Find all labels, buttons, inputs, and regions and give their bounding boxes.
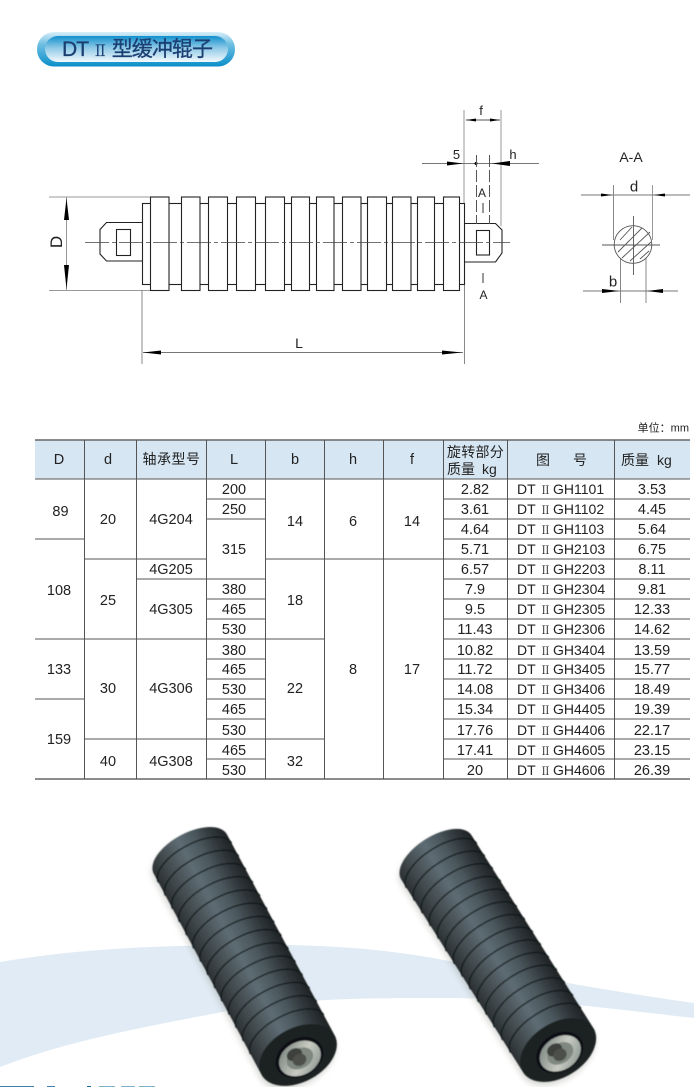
column rotating part mass: 9.5 — [465, 602, 485, 618]
left shaft end — [100, 222, 142, 261]
column rotating part mass — [457, 482, 493, 779]
column drawing number: GH2306 — [553, 621, 605, 637]
dimension D — [47, 197, 150, 290]
dimensions f, 5, h and section marks: 5 — [453, 147, 460, 162]
dimension D: D — [47, 236, 66, 248]
column total mass: 13.59 — [634, 643, 670, 659]
column drawing number: GH3406 — [553, 681, 605, 697]
product photo: left roller — [141, 816, 349, 1087]
column rotating part mass: 11.72 — [457, 662, 493, 678]
background swoosh — [0, 945, 694, 1067]
column L: 530 — [222, 723, 246, 739]
column rotating part mass: 15.34 — [457, 702, 493, 718]
column drawing number: DT — [517, 722, 536, 738]
column drawing number: Ⅱ — [540, 505, 551, 517]
column drawing number: DT — [517, 521, 536, 537]
column drawing number — [517, 481, 605, 778]
merged columns D, d, bearing, b, h, f: 159 — [47, 732, 71, 748]
column drawing number: Ⅱ — [540, 585, 551, 597]
column drawing number: Ⅱ — [540, 726, 551, 738]
merged columns D, d, bearing, b, h, f: 4G205 — [149, 562, 193, 578]
column L: 465 — [222, 743, 246, 759]
column L: 530 — [222, 622, 246, 638]
column L — [222, 482, 246, 779]
unit label: 单位：mm — [638, 420, 689, 434]
table header labels: L — [230, 452, 238, 468]
column total mass: 4.45 — [638, 502, 666, 518]
table header labels: kg — [482, 461, 497, 477]
column drawing number: DT — [517, 581, 536, 597]
column rotating part mass: 11.43 — [457, 622, 493, 638]
merged columns D, d, bearing, b, h, f: 18 — [287, 593, 303, 609]
dimension L — [142, 285, 464, 364]
merged columns D, d, bearing, b, h, f: 133 — [47, 662, 71, 678]
column drawing number: Ⅱ — [540, 485, 551, 497]
product photo: right roller — [387, 817, 609, 1087]
column drawing number: GH4406 — [553, 722, 605, 738]
column drawing number: DT — [517, 661, 536, 677]
column drawing number: DT — [517, 642, 536, 658]
column drawing number: Ⅱ — [540, 605, 551, 617]
column rotating part mass: 7.9 — [465, 582, 485, 598]
centre line — [85, 242, 510, 244]
column drawing number: Ⅱ — [540, 525, 551, 537]
hatched shaft circle — [602, 216, 660, 275]
column drawing number: DT — [517, 681, 536, 697]
column L: 380 — [222, 582, 246, 598]
dimensions f, 5, h and section marks — [422, 103, 539, 302]
title pill — [37, 32, 235, 66]
column total mass: 8.11 — [638, 562, 666, 578]
column total mass: 9.81 — [638, 582, 666, 598]
table header labels: b — [291, 452, 299, 468]
column L: 380 — [222, 643, 246, 659]
column drawing number: Ⅱ — [540, 646, 551, 658]
column rotating part mass: 10.82 — [457, 643, 493, 659]
table header labels: D — [54, 452, 64, 468]
column total mass: 6.75 — [638, 542, 666, 558]
dimensions f, 5, h and section marks: h — [509, 147, 517, 162]
column L: 530 — [222, 682, 246, 698]
column drawing number: GH4405 — [553, 701, 605, 717]
column drawing number: DT — [517, 762, 536, 778]
merged columns D, d, bearing, b, h, f: 4G305 — [149, 602, 193, 618]
merged columns D, d, bearing, b, h, f — [47, 504, 420, 770]
dimensions f, 5, h and section marks: A — [479, 288, 488, 302]
merged columns D, d, bearing, b, h, f: 4G204 — [149, 512, 193, 528]
table header labels — [54, 444, 672, 477]
column drawing number: Ⅱ — [540, 705, 551, 717]
column drawing number: GH1102 — [553, 501, 604, 517]
table header labels: 旋转部分 — [447, 444, 504, 460]
section A-A drawing — [581, 149, 690, 303]
column drawing number: GH1103 — [553, 521, 604, 537]
section title: A-A — [619, 149, 643, 165]
column rotating part mass: 6.57 — [461, 562, 489, 578]
section A-A drawing: b — [609, 274, 617, 290]
column total mass: 3.53 — [638, 482, 666, 498]
roller body — [142, 197, 464, 290]
dimensions f, 5, h and section marks: A — [478, 186, 486, 200]
column total mass: 18.49 — [634, 682, 670, 698]
column rotating part mass: 17.41 — [457, 743, 493, 759]
merged columns D, d, bearing, b, h, f: 30 — [100, 681, 116, 697]
dimensions f, 5, h and section marks: f — [479, 103, 483, 118]
dimension L: L — [295, 335, 303, 351]
merged columns D, d, bearing, b, h, f: 6 — [349, 514, 357, 530]
column drawing number: Ⅱ — [540, 545, 551, 557]
column drawing number: GH1101 — [553, 481, 604, 497]
column drawing number: DT — [517, 481, 536, 497]
column drawing number: GH2103 — [553, 541, 605, 557]
merged columns D, d, bearing, b, h, f: 22 — [287, 681, 303, 697]
column rotating part mass: 3.61 — [461, 502, 489, 518]
column rotating part mass: 2.82 — [461, 482, 489, 498]
table header labels: h — [349, 452, 357, 468]
column drawing number: DT — [517, 601, 536, 617]
table header labels: 轴承型号 — [142, 451, 200, 467]
column drawing number: GH4606 — [553, 762, 605, 778]
merged columns D, d, bearing, b, h, f: 4G306 — [149, 681, 193, 697]
table header background — [35, 440, 690, 479]
merged columns D, d, bearing, b, h, f: 8 — [349, 662, 357, 678]
column drawing number: GH3404 — [553, 642, 605, 658]
merged columns D, d, bearing, b, h, f: 14 — [287, 514, 303, 530]
column drawing number: Ⅱ — [540, 685, 551, 697]
merged columns D, d, bearing, b, h, f: 89 — [52, 504, 69, 520]
column total mass: 14.62 — [634, 622, 670, 638]
table header labels: kg — [657, 452, 672, 468]
right shaft end — [464, 224, 502, 262]
column drawing number: DT — [517, 501, 536, 517]
merged columns D, d, bearing, b, h, f: 14 — [404, 514, 420, 530]
column drawing number: Ⅱ — [540, 766, 551, 778]
column rotating part mass: 4.64 — [461, 522, 489, 538]
column rotating part mass: 20 — [467, 763, 483, 779]
column drawing number: DT — [517, 742, 536, 758]
table rules — [35, 440, 690, 779]
merged columns D, d, bearing, b, h, f: 25 — [100, 593, 116, 609]
column L: 465 — [222, 702, 246, 718]
merged columns D, d, bearing, b, h, f: 20 — [100, 512, 116, 528]
specification table — [35, 440, 690, 779]
merged columns D, d, bearing, b, h, f: 17 — [404, 662, 420, 678]
column drawing number: Ⅱ — [540, 665, 551, 677]
column L: 465 — [222, 602, 246, 618]
merged columns D, d, bearing, b, h, f: 32 — [287, 754, 303, 770]
column drawing number: GH2304 — [553, 581, 605, 597]
column rotating part mass: 5.71 — [461, 542, 489, 558]
table header labels: 质量 — [447, 461, 475, 477]
column total mass: 15.77 — [634, 662, 670, 678]
column drawing number: Ⅱ — [540, 746, 551, 758]
column total mass: 12.33 — [634, 602, 670, 618]
column total mass — [634, 482, 670, 779]
table header labels: f — [410, 452, 415, 468]
column total mass: 19.39 — [634, 702, 670, 718]
column rotating part mass: 14.08 — [457, 682, 493, 698]
column drawing number: DT — [517, 621, 536, 637]
column total mass: 23.15 — [634, 743, 670, 759]
section A-A drawing: d — [630, 178, 638, 196]
column rotating part mass: 17.76 — [457, 723, 493, 739]
merged columns D, d, bearing, b, h, f: 40 — [100, 754, 116, 770]
merged columns D, d, bearing, b, h, f: 4G308 — [149, 754, 193, 770]
column drawing number: GH2203 — [553, 561, 605, 577]
table header labels: d — [104, 452, 112, 468]
column total mass: 26.39 — [634, 763, 670, 779]
column drawing number: GH4605 — [553, 742, 605, 758]
column total mass: 22.17 — [634, 723, 670, 739]
column L: 465 — [222, 662, 246, 678]
column drawing number: GH2305 — [553, 601, 605, 617]
column L: 250 — [222, 502, 246, 518]
column drawing number: DT — [517, 541, 536, 557]
table header labels: 号 — [573, 452, 587, 468]
title text: DT Ⅱ 型缓冲辊子 — [62, 38, 213, 61]
column drawing number: Ⅱ — [540, 565, 551, 577]
column L: 200 — [222, 482, 246, 498]
table header labels: 质量 — [621, 452, 649, 468]
merged columns D, d, bearing, b, h, f: 108 — [47, 583, 71, 599]
column drawing number: DT — [517, 701, 536, 717]
column drawing number: Ⅱ — [540, 625, 551, 637]
column total mass: 5.64 — [638, 522, 666, 538]
table header labels: 图 — [536, 452, 550, 468]
column L: 315 — [222, 542, 246, 558]
column L: 530 — [222, 763, 246, 779]
bottom clipped footer text — [0, 1086, 155, 1087]
column drawing number: DT — [517, 561, 536, 577]
roller front view drawing — [85, 197, 510, 290]
column drawing number: GH3405 — [553, 661, 605, 677]
